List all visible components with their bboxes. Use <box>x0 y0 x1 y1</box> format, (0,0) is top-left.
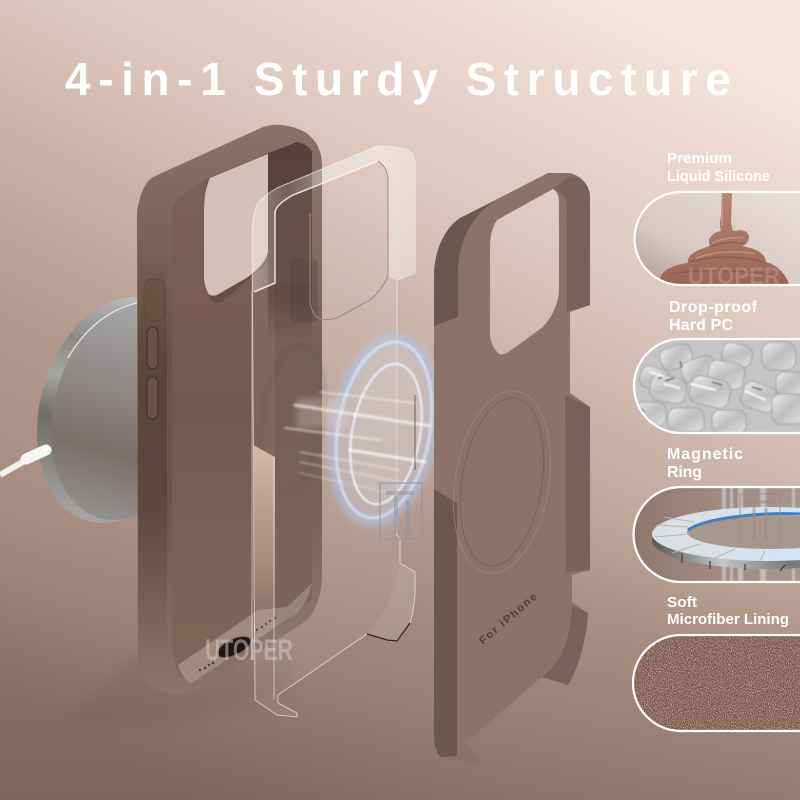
motion streak lines <box>285 392 430 495</box>
label <box>667 150 770 185</box>
right wall shade <box>542 176 590 685</box>
watermark: bottom text: UTOPER <box>205 634 293 667</box>
panel: soft microfiber lining <box>633 594 800 731</box>
right microfiber lining <box>434 173 590 765</box>
beads <box>630 337 800 435</box>
clear lower side strip <box>253 445 275 640</box>
clear shoulder highlight <box>252 146 415 292</box>
glow block <box>297 398 347 428</box>
tint over left case <box>275 283 312 630</box>
border <box>634 487 800 582</box>
panel: premium liquid silicone <box>630 150 800 290</box>
title: 4-in-1 Sturdy Structure <box>65 53 731 105</box>
label: Drop-proof <box>669 299 758 316</box>
charging port <box>214 632 254 662</box>
clear camera window <box>310 161 388 320</box>
ring imprint <box>441 384 563 580</box>
image area <box>630 190 800 287</box>
watermark stamp <box>740 494 780 546</box>
floor strip <box>178 583 312 683</box>
internal button recess <box>291 260 317 322</box>
floor shadow <box>60 655 290 725</box>
case outer rim <box>137 125 322 694</box>
border <box>633 635 800 731</box>
speaker dots <box>199 617 276 671</box>
panel: drop-proof hard PC <box>630 299 800 435</box>
embossed model text: For iPhone <box>477 591 539 647</box>
clear hard PC case <box>252 146 415 717</box>
internal ring imprint <box>252 342 332 498</box>
label <box>669 299 758 334</box>
left silicone case <box>137 125 332 694</box>
camera cutout <box>204 154 268 296</box>
clear lower corner <box>368 563 415 641</box>
volume up button <box>147 327 158 369</box>
microfiber swatch <box>633 635 800 731</box>
label <box>667 594 789 628</box>
left wall shade <box>434 200 497 757</box>
watermark: UTOPER <box>688 263 780 290</box>
label: Ring <box>667 464 702 481</box>
magnetic ring glow <box>285 331 449 529</box>
label: Magnetic <box>667 446 743 463</box>
clear shell body <box>252 146 415 717</box>
bright inner edge <box>254 161 378 292</box>
border <box>634 192 800 285</box>
strip bright lines <box>252 292 274 700</box>
icon: magnetic charger with cable <box>0 279 230 541</box>
lining silhouette <box>434 173 590 765</box>
label: Liquid Silicone <box>667 168 770 185</box>
ring image <box>630 485 800 585</box>
left side shade <box>138 250 167 660</box>
border <box>634 339 800 433</box>
label: Microfiber Lining <box>667 611 789 628</box>
watermark: stamp <box>380 483 422 539</box>
panel: magnetic ring <box>630 446 800 585</box>
label: Hard PC <box>669 317 733 334</box>
label: Premium <box>667 150 732 167</box>
volume down button <box>147 377 158 419</box>
label <box>667 446 743 481</box>
slot line <box>414 395 416 470</box>
case interior <box>172 142 312 683</box>
label: Soft <box>667 594 697 611</box>
camera cutout lip <box>206 158 268 303</box>
action button <box>144 279 165 321</box>
right inner wall <box>268 142 312 340</box>
